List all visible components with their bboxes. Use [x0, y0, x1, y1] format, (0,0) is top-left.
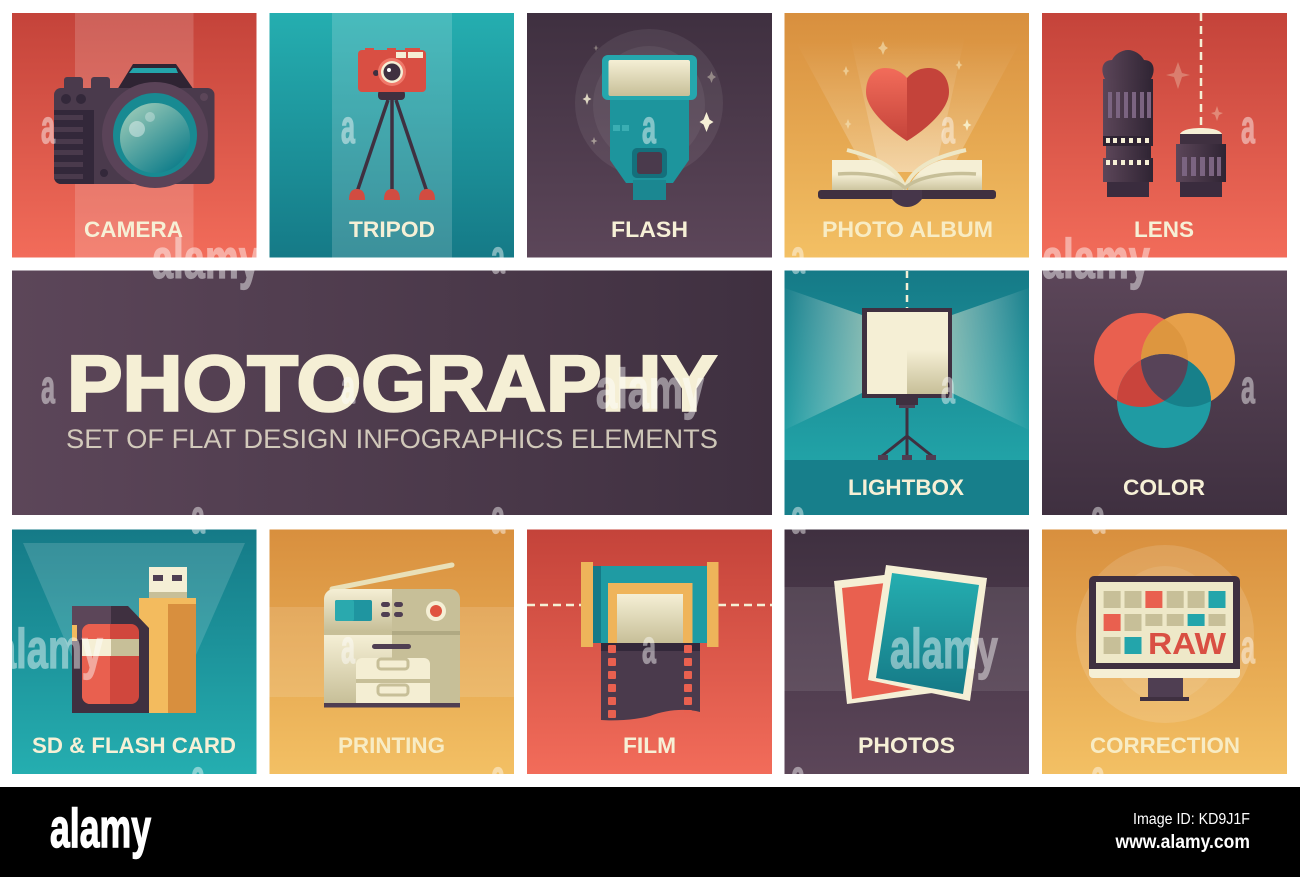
panel: title [12, 270, 772, 515]
watermarks: a [491, 750, 505, 803]
icon: photo album [796, 36, 1020, 207]
label: lens: LENS [1134, 217, 1194, 242]
panel: printing [270, 530, 514, 774]
watermarks: a [791, 490, 805, 543]
panel: flash [527, 13, 772, 258]
label: correction: CORRECTION [1090, 733, 1240, 758]
subtitle: SET OF FLAT DESIGN INFOGRAPHICS ELEMENTS [66, 424, 718, 454]
icon: flash [575, 29, 723, 200]
watermarks: a [191, 490, 205, 543]
icon: film roll [581, 562, 718, 720]
text: raw: RAW [1148, 626, 1227, 661]
icon: monitor [1076, 545, 1254, 723]
panel: sd and flash card [12, 530, 256, 774]
icon: printer [324, 565, 460, 708]
footer logo: alamy [50, 797, 151, 859]
label: photo album: PHOTO ALBUM [822, 217, 993, 242]
panel: photos [784, 530, 1029, 774]
watermarks: a [41, 100, 55, 153]
watermarks: a [491, 230, 505, 283]
dashed lines [527, 604, 772, 606]
label: color: COLOR [1123, 475, 1205, 500]
heading: photography: PHOTOGRAPHY [67, 338, 717, 428]
watermarks: a [941, 100, 955, 153]
watermarks: alamy [1042, 227, 1150, 290]
watermarks: alamy [890, 617, 998, 680]
watermarks [0, 100, 1255, 803]
watermarks: a [341, 360, 355, 413]
footer bar [0, 787, 1300, 877]
label: tripod: TRIPOD [349, 217, 435, 242]
icon: camera [54, 64, 214, 188]
icon: color circles [1094, 313, 1235, 448]
label: flash: FLASH [611, 217, 688, 242]
icon: lightbox [784, 271, 1029, 460]
watermarks: alamy [152, 227, 260, 290]
watermarks: a [1091, 490, 1105, 543]
watermarks: a [191, 750, 205, 803]
label: printing: PRINTING [338, 733, 445, 758]
icon: sd and flash card [23, 543, 245, 713]
watermarks: alamy [596, 357, 704, 420]
panel: correction [1042, 530, 1287, 774]
panel: photo album [784, 13, 1029, 258]
watermarks: a [941, 360, 955, 413]
label: camera: CAMERA [84, 217, 183, 242]
watermarks: a [341, 100, 355, 153]
watermarks: a [791, 750, 805, 803]
panel: color [1042, 270, 1287, 515]
panel: lens [1042, 13, 1287, 258]
panel: film [527, 530, 772, 774]
panel: lightbox [784, 270, 1029, 515]
icon: photos [834, 565, 987, 704]
watermarks: a [41, 360, 55, 413]
watermarks: a [791, 230, 805, 283]
dashed line [1200, 13, 1202, 128]
watermarks: a [642, 100, 656, 153]
icon: tripod [349, 48, 435, 200]
panel: camera [12, 13, 256, 258]
watermarks: a [642, 620, 656, 673]
label: lightbox: LIGHTBOX [848, 475, 964, 500]
watermarks: a [341, 620, 355, 673]
watermarks: a [491, 490, 505, 543]
watermarks: a [1091, 750, 1105, 803]
label: sd and flash card: SD & FLASH CARD [32, 733, 236, 758]
footer image id: Image ID: KD9J1F [1133, 811, 1250, 828]
panel: tripod [270, 13, 514, 258]
footer url: www.alamy.com [1115, 832, 1250, 853]
label: film: FILM [623, 733, 676, 758]
icon: lenses [1102, 50, 1226, 197]
label: photos: PHOTOS [858, 733, 955, 758]
